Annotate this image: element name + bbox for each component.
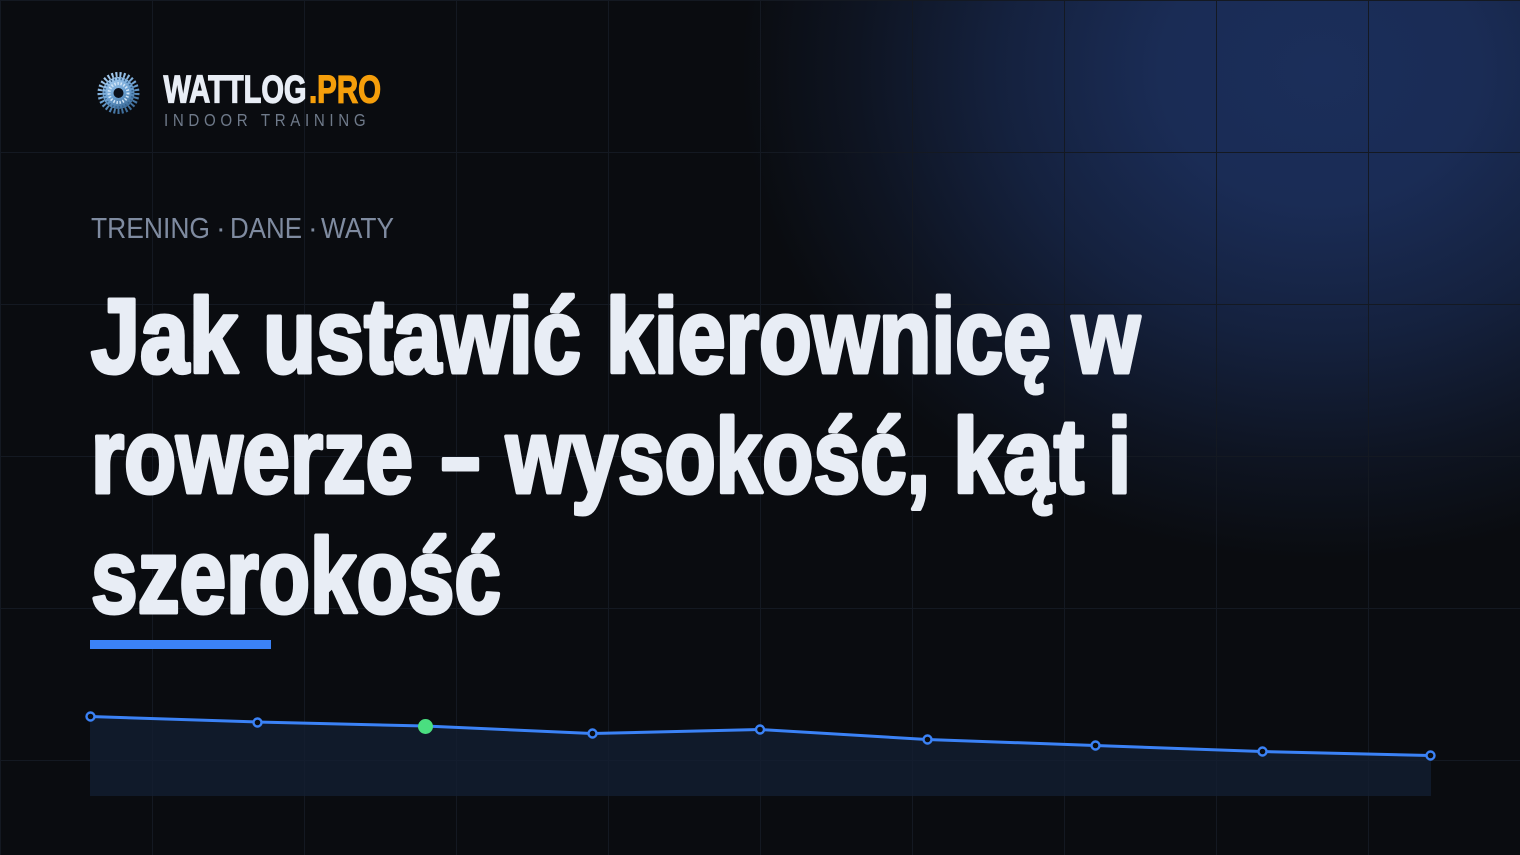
brand name: WATTLOG [164, 68, 306, 112]
title: i [1108, 398, 1131, 516]
highlighted marker [418, 719, 433, 734]
eyebrow label: TRENING [91, 213, 210, 245]
title: w [1071, 278, 1140, 396]
title: rowerze [91, 398, 413, 516]
eyebrow label [91, 213, 394, 245]
accent underline [90, 640, 271, 649]
eyebrow label: DANE [230, 213, 302, 245]
brand tagline: INDOOR TRAINING [164, 110, 366, 130]
icon: cassette gear [100, 74, 137, 112]
eyebrow label: · [308, 213, 318, 245]
title: wysokość, [505, 398, 930, 516]
title: kąt [953, 398, 1084, 516]
eyebrow label: · [216, 213, 226, 245]
title: Jak [91, 278, 239, 396]
chart line [90, 716, 1430, 756]
line chart [86, 712, 1434, 796]
title: ustawić [263, 278, 581, 396]
title: kierownicę [606, 278, 1051, 396]
title [91, 278, 1140, 636]
chart markers [86, 712, 1434, 760]
title: – [441, 398, 480, 516]
brand name: .PRO [309, 68, 381, 112]
logo [100, 68, 381, 130]
chart area fill [90, 716, 1431, 796]
eyebrow label: WATY [321, 213, 394, 245]
title: szerokość [91, 518, 501, 636]
